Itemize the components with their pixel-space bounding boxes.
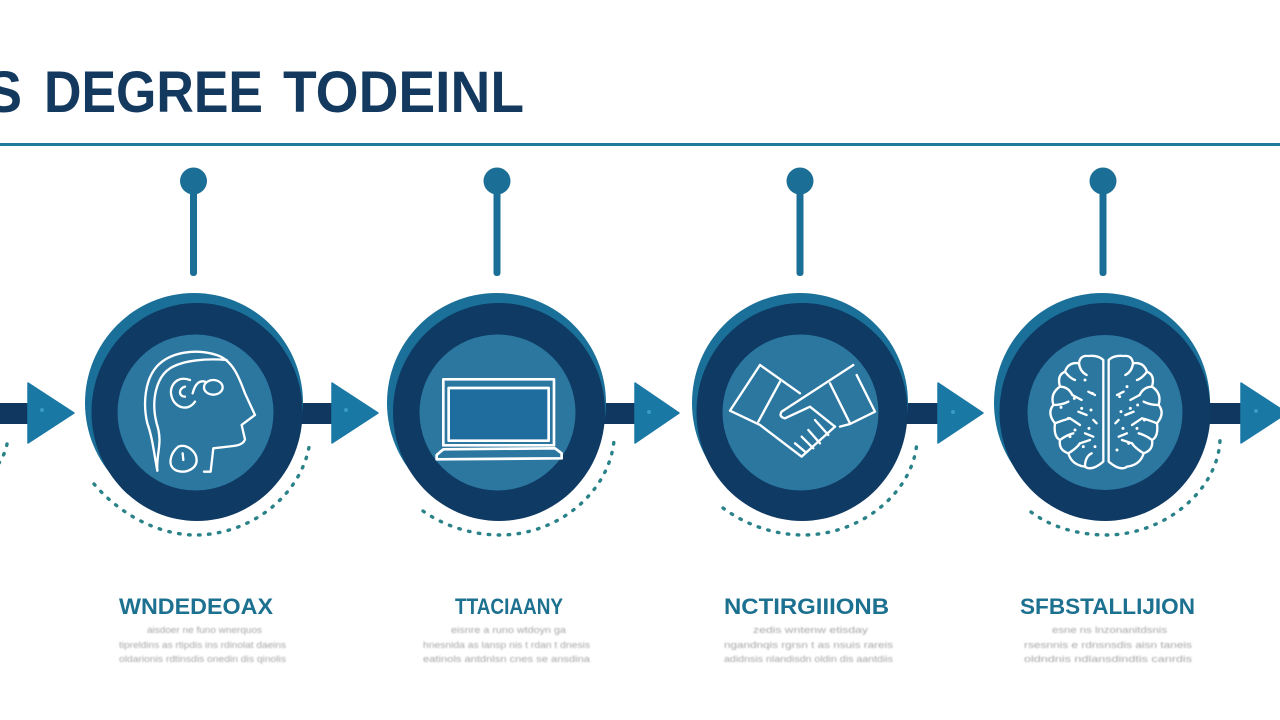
body 3: adidnsis nlandisdn oldin dis aantdiis (724, 654, 894, 664)
step 2: laptop (387, 293, 679, 535)
left edge arrow (0, 383, 74, 466)
right hemisphere (1109, 356, 1162, 468)
body 4: esne ns lnzonanitdsnis (1052, 625, 1168, 635)
pin 3 (786, 168, 814, 276)
heading 4: SFBSTALLIJION (1020, 594, 1195, 619)
pin 1 (180, 168, 207, 276)
dotted arc 2 (423, 440, 614, 535)
body 3 (724, 625, 894, 664)
step 1: head (85, 293, 378, 535)
header rule (0, 143, 1280, 146)
body 1 (119, 625, 287, 664)
arrow 2 (595, 383, 679, 443)
body 1: aisdoer ne funo wnerquos (147, 625, 263, 635)
heading 2: TTACIAANY (455, 594, 563, 619)
ring 2 (387, 293, 606, 521)
body 1: oldarionis rdtinsdis onedin dis qinolis (119, 654, 287, 664)
heading 1: WNDEDEOAX (119, 594, 273, 619)
dotted arc 1 (94, 440, 310, 535)
icon: handshake (730, 365, 875, 457)
column 1 text (119, 594, 287, 664)
body 4 (1024, 625, 1193, 664)
pin 2 (484, 168, 510, 276)
heading 3: NCTIRGIIIONB (724, 594, 889, 619)
icon: head (145, 352, 255, 472)
body 3: zedis wntenw etisday (753, 625, 869, 635)
body 2: eatinols antdnlsn cnes se ansdina (423, 654, 590, 664)
column 3 text (724, 594, 894, 664)
arrow 3 (898, 383, 983, 443)
body 2 (423, 625, 591, 664)
ring 1 (85, 293, 303, 521)
body 2: eisnre a runo wtdoyn ga (451, 625, 566, 635)
column 4 text (1020, 594, 1195, 664)
ring 4 (994, 293, 1210, 521)
body 2: hnesnida as lansp nis t rdan t dnesis (423, 640, 591, 650)
dotted arc 3 (723, 440, 917, 535)
step 4: brain (994, 293, 1280, 535)
dotted arc 4 (1031, 440, 1220, 535)
body 1: tipreldins as rtipdis ins rdinolat daeins (119, 640, 287, 650)
title: DEGREE (44, 60, 263, 125)
step 3: handshake (692, 293, 983, 535)
body 3: ngandnqis rgrsn t as nsuis rareis (724, 640, 894, 650)
body 4: oldndnis ndlansdindtis canrdis (1024, 654, 1193, 664)
icon: brain (1050, 356, 1162, 468)
column 2 text (423, 594, 591, 664)
ring 3 (692, 293, 908, 521)
pin 4 (1090, 168, 1116, 276)
arrow 4 (1200, 383, 1280, 443)
title (0, 60, 524, 125)
connector pins (180, 168, 1116, 276)
left hemisphere (1050, 356, 1103, 468)
title: TODEINL (283, 60, 524, 125)
arrow 1 (290, 383, 378, 443)
icon: laptop (437, 379, 562, 459)
body 4: rsesnnis e rdnsnsdis aisn taneis (1024, 640, 1193, 650)
